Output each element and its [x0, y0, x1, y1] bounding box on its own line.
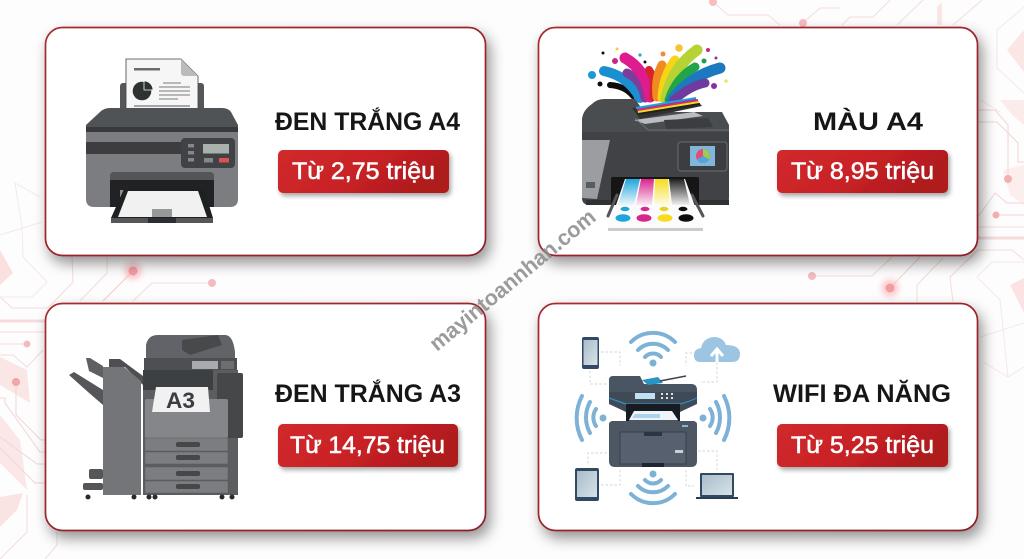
watermark: mayintoannhan.com	[424, 204, 600, 356]
heading: ĐEN TRẮNG A4	[275, 106, 460, 136]
heading: MÀU A4	[813, 107, 923, 136]
heading: WIFI ĐA NĂNG	[773, 379, 951, 408]
price badge: Từ 8,95 triệu	[791, 158, 934, 185]
price badge	[278, 424, 458, 467]
card frame	[538, 28, 978, 256]
icon: A4 mono printer	[86, 59, 238, 223]
price badge: Từ 2,75 triệu	[292, 158, 435, 185]
icon: colour printer with ink splash	[582, 44, 729, 231]
paper label: A3	[166, 388, 195, 413]
price badge: Từ 14,75 triệu	[290, 432, 445, 459]
price badge	[777, 424, 948, 467]
panel: black and white A3	[46, 304, 486, 530]
price badge: Từ 5,25 triệu	[791, 432, 934, 459]
icon: A3 copier with finisher	[69, 335, 243, 500]
heading: ĐEN TRẮNG A3	[275, 378, 461, 408]
panel: colour A4	[538, 28, 978, 256]
card frame	[46, 28, 486, 256]
price badge	[278, 150, 449, 193]
panel: multifunction wifi	[538, 304, 978, 530]
panel: black and white A4	[46, 28, 486, 256]
icon: wifi printer with devices	[575, 333, 740, 503]
circuit nodes	[12, 0, 1012, 386]
card frame	[538, 304, 978, 530]
card frame	[46, 304, 486, 530]
price badge	[777, 150, 948, 193]
